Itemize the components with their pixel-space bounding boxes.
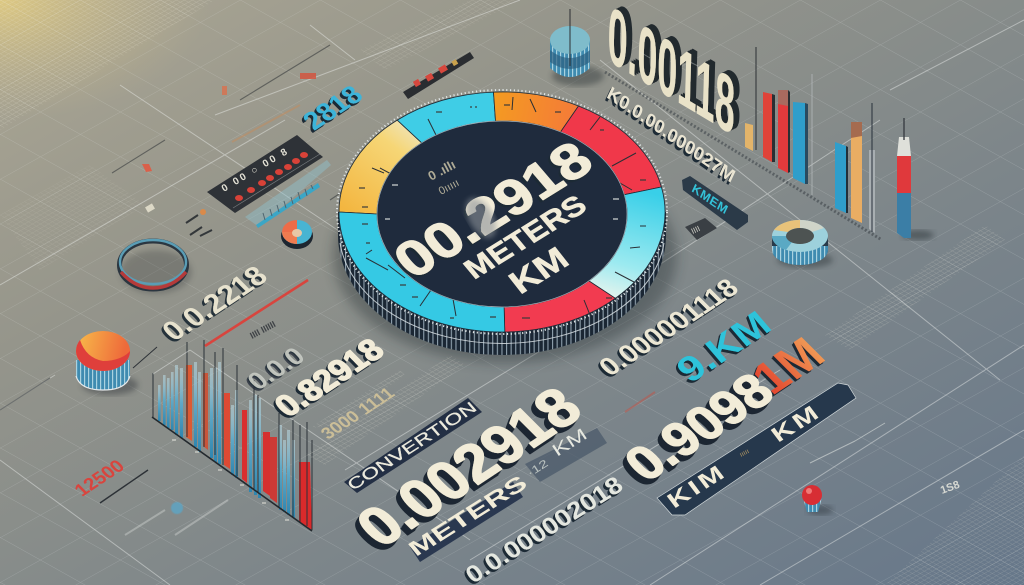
gauge ring segments (339, 92, 665, 332)
chart dark stems (153, 340, 312, 530)
orange red value 1M: 1M (741, 328, 836, 404)
dark tag with red dots (207, 135, 323, 213)
gauge main value: 00.2918 (382, 131, 604, 289)
gauge bottom rim (340, 243, 664, 344)
chart axis ticks (172, 440, 289, 520)
faded hatch band (305, 355, 465, 465)
small dark tag (685, 218, 717, 240)
cyan value 9.KM: 9.KM (669, 304, 779, 390)
tag 12 KM (525, 424, 607, 482)
tag CONVERTION: CONVERTION (344, 399, 481, 494)
gauge ring small marks (359, 105, 646, 318)
text K0.0.000027M: K0.0.00.000027M (604, 82, 738, 187)
gauge side ribs (338, 212, 666, 355)
red line (205, 280, 308, 346)
value 2818: 2818 (296, 80, 369, 135)
hatched rail under top number (605, 72, 882, 240)
gauge: main dial (333, 90, 677, 363)
gauge small caption: 0ııııı (437, 177, 461, 198)
small dark tag: IIII (690, 224, 702, 236)
tag 12 KM: KM (548, 424, 591, 460)
pen shaped bar (897, 118, 934, 240)
dark tag with red dots: 0 00 ○ 00 8 (220, 146, 291, 195)
KM tag panel: KIM (662, 459, 731, 513)
lower left faint items (100, 470, 228, 535)
small marker text strokes upper left (142, 73, 316, 172)
chart red bars (186, 365, 312, 530)
bar chart lower left (152, 340, 312, 531)
cyan ruler strip (245, 160, 331, 228)
main value 0.002918: 0.002918 (343, 376, 595, 558)
red value 12500: 12500 (71, 457, 129, 501)
gauge rim dots (337, 90, 667, 334)
gauge small caption (425, 157, 461, 198)
value 0.0.2218: 0.0.2218 (156, 260, 274, 347)
segmented ring icon (772, 220, 833, 268)
tag METERS: METERS (403, 470, 532, 561)
top blue cylinder icon (550, 9, 604, 86)
faint right side notes (640, 52, 885, 463)
tan faded value: 3000 1111 (317, 384, 399, 443)
gauge face (377, 121, 627, 307)
gauge ring ticks (366, 97, 646, 316)
gauge face ring outer (339, 92, 665, 332)
cyan label panel (682, 176, 748, 230)
bar chart upper right (745, 47, 875, 233)
gauge unit KM: KM (501, 240, 576, 301)
value 0.0.0 faded: 0.0.0 (241, 342, 311, 395)
gauge centre smudge (460, 193, 502, 243)
ring icon (120, 240, 192, 294)
red ball icon (802, 485, 833, 515)
small text near line: IIII IIIIII (248, 319, 277, 341)
value 0.9098: 0.9098 (613, 363, 785, 491)
small corner text: 1S8 (939, 479, 961, 497)
red tick tag near top (403, 52, 474, 99)
KM tag panel: ııııı (739, 448, 751, 459)
KM tag panel (657, 383, 856, 515)
gauge unit METERS: METERS (457, 189, 593, 285)
cyan label panel: KMEM (690, 181, 730, 217)
tag 12 KM: ·12 (525, 457, 550, 479)
small gadget marks (145, 203, 212, 236)
value 0.000001118: 0.000001118 (592, 273, 745, 381)
hatch band dark (310, 370, 405, 428)
chart axis line (152, 417, 312, 531)
gauge small caption: 0 .ıllı (425, 157, 458, 184)
gauge shadow (333, 147, 677, 363)
faint red mark (625, 392, 655, 412)
small pie button (281, 220, 313, 249)
value 0.82918: 0.82918 (267, 332, 391, 423)
KM tag panel: KM (766, 399, 826, 447)
chart blue bars (158, 362, 295, 518)
orange topped cylinder icon (76, 331, 157, 395)
